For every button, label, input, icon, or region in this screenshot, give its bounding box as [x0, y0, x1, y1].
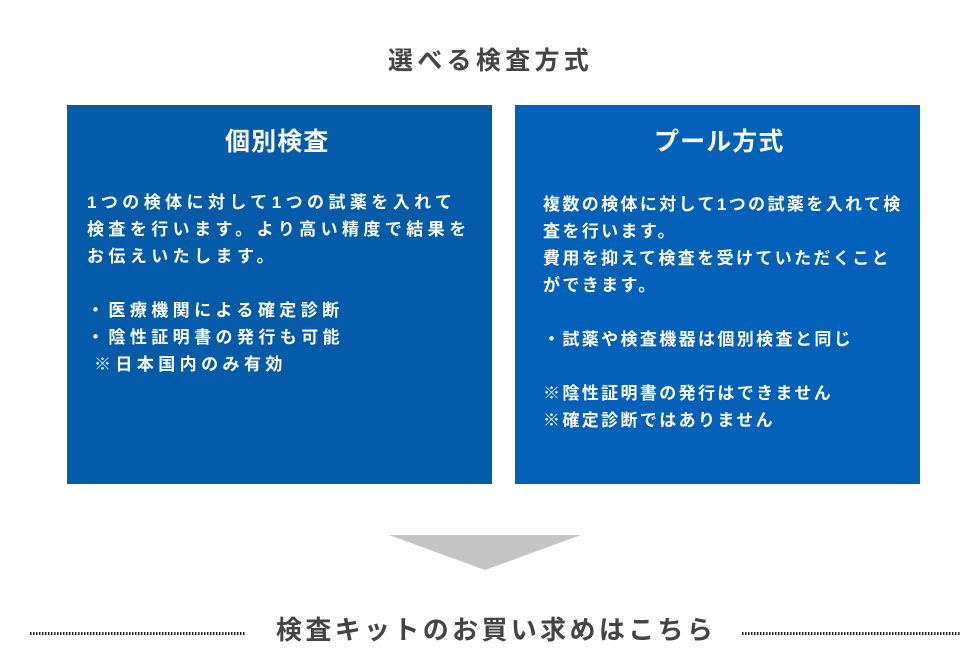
description text: individual test: 検査を行います。より高い精度で結果を: [87, 220, 471, 239]
description text: individual test: 1つの検体に対して1つの試薬を入れて: [87, 193, 456, 212]
notes: pool method: [543, 384, 833, 430]
description text: individual test: お伝えいたします。: [87, 247, 278, 266]
description text: individual test: [87, 193, 471, 266]
feature list: individual test: ※日本国内のみ有効: [94, 355, 287, 374]
feature list: pool method: ・試薬や検査機器は個別検査と同じ: [543, 330, 853, 349]
notes: pool method: ※陰性証明書の発行はできません: [543, 384, 833, 403]
feature list: individual test: ・医療機関による確定診断: [87, 301, 344, 320]
panel heading: pool method: プール方式: [654, 128, 785, 156]
description text: pool method: ができます。: [543, 276, 658, 295]
description text: pool method: 査を行います。: [543, 222, 677, 241]
feature list: individual test: ・陰性証明書の発行も可能: [87, 328, 344, 347]
call to action heading: 検査キットのお買い求めはこちら: [276, 615, 716, 645]
description text: pool method: [543, 195, 903, 295]
description text: pool method: 費用を抑えて検査を受けていただくこと: [543, 249, 891, 268]
panel heading: individual test: 個別検査: [225, 128, 329, 156]
notes: pool method: ※確定診断ではありません: [543, 411, 775, 430]
panel: individual test: [67, 105, 492, 484]
feature list: individual test: [87, 301, 344, 374]
panel: pool method: [515, 105, 920, 484]
arrow: down triangle: [389, 535, 581, 570]
title: 選べる検査方式: [388, 47, 593, 75]
description text: pool method: 複数の検体に対して1つの試薬を入れて検: [543, 195, 903, 214]
